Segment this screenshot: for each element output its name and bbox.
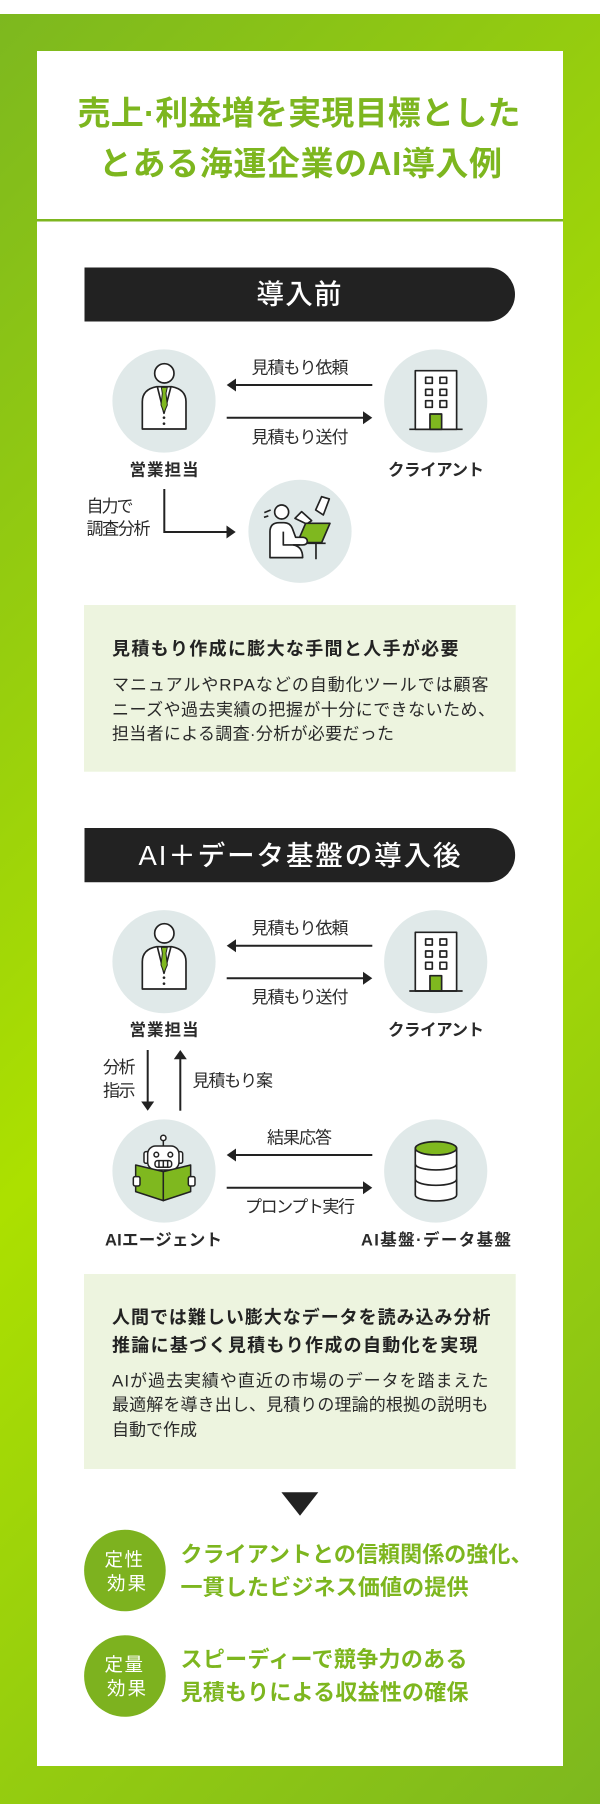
arrow: draft quote [174,1050,273,1111]
icon: worker at desk [264,497,330,559]
client node: クライアント [388,460,484,480]
title [78,94,520,182]
solution body [112,1370,488,1439]
sales person node [112,910,216,1040]
badge: quantitative [84,1635,166,1717]
quantitative effect text: 見積もりによる収益性の確保 [180,1680,468,1705]
solution heading: 人間では難しい膨大なデータを読み込み分析 [112,1306,490,1327]
heading bar: after: AI＋データ基盤の導入後 [138,840,460,871]
arrow: quote delivery: 見積もり送付 [252,428,348,447]
icon: office building [409,371,463,429]
icon: sales person [142,924,186,989]
solution body: 自動で作成 [112,1420,197,1439]
arrow: results response [227,1128,372,1162]
arrow: quote request [227,358,372,392]
arrow: self research [86,489,236,538]
arrow: quote request [227,919,372,952]
AI and data platform node: AI基盤·データ基盤 [361,1229,511,1249]
icon: robot reading a book [133,1135,195,1201]
arrow: quote request: 見積もり依頼 [252,358,348,377]
sales person node [112,349,216,480]
arrow: draft quote: 見積もり案 [192,1071,273,1090]
quantitative effect [84,1635,468,1717]
heading bar: before: 導入前 [256,278,342,310]
arrow: results response: 結果応答 [267,1128,332,1148]
arrow: analysis instruction: 指示 [103,1081,136,1100]
client node [384,910,487,1040]
quantitative effect text [180,1647,468,1705]
badge: qualitative: 定性 [104,1549,143,1570]
problem body: マニュアルやRPAなどの自動化ツールでは顧客 [112,675,488,694]
qualitative effect [84,1530,532,1611]
sales person node: 営業担当 [130,1021,198,1040]
qualitative effect text: クライアントとの信頼関係の強化、 [180,1542,532,1567]
solution body: AIが過去実績や直近の市場のデータを踏まえた [112,1370,488,1390]
icon: sales person [142,364,186,429]
problem body: 担当者による調査·分析が必要だった [112,725,394,744]
qualitative effect text [180,1542,532,1600]
arrow: self research: 自力で [86,497,134,516]
panel: after solution [84,1274,516,1469]
AI agent node [105,1119,222,1249]
heading bar: before [84,268,515,322]
heading bar: after [84,828,515,882]
panel: before problem [84,605,516,772]
arrow: quote delivery: 見積もり送付 [252,988,348,1007]
problem body [112,675,495,744]
icon: office building [409,932,463,991]
quantitative effect text: スピーディーで競争力のある [180,1647,468,1672]
sales person node: 営業担当 [130,460,198,480]
badge: quantitative: 定量 [104,1654,143,1675]
client node [384,349,487,480]
diagram: before [86,349,487,583]
solution body: 最適解を導き出し、見積りの理論的根拠の説明も [112,1396,488,1415]
solution heading: 推論に基づく見積もり作成の自動化を実現 [112,1335,478,1356]
arrow: analysis instruction [103,1050,154,1111]
arrow: run prompt: プロンプト実行 [245,1197,355,1216]
arrow: quote delivery [227,972,372,1007]
problem heading: 見積もり作成に膨大な手間と人手が必要 [112,638,458,659]
badge: qualitative [84,1530,166,1611]
arrow: quote delivery [227,411,372,447]
title: 売上·利益増を実現目標とした [78,94,520,132]
solution heading [112,1306,490,1356]
badge: qualitative: 効果 [107,1573,146,1594]
qualitative effect text: 一貫したビジネス価値の提供 [180,1575,468,1600]
AI agent node: AIエージェント [105,1231,222,1249]
arrow: analysis instruction: 分析 [103,1058,136,1077]
client node: クライアント [388,1021,484,1040]
title: とある海運企業のAI導入例 [99,145,502,182]
badge: quantitative: 効果 [107,1678,146,1699]
icon: database cylinder [415,1142,457,1201]
AI and data platform node [361,1119,511,1249]
overworked researcher node [248,480,352,583]
problem body: ニーズや過去実績の把握が十分にできないため、 [112,700,495,719]
arrow: down triangle [281,1492,318,1516]
arrow: self research: 調査分析 [86,519,150,538]
diagram: after [103,910,511,1249]
arrow: quote request: 見積もり依頼 [252,919,348,938]
arrow: run prompt [227,1181,372,1216]
